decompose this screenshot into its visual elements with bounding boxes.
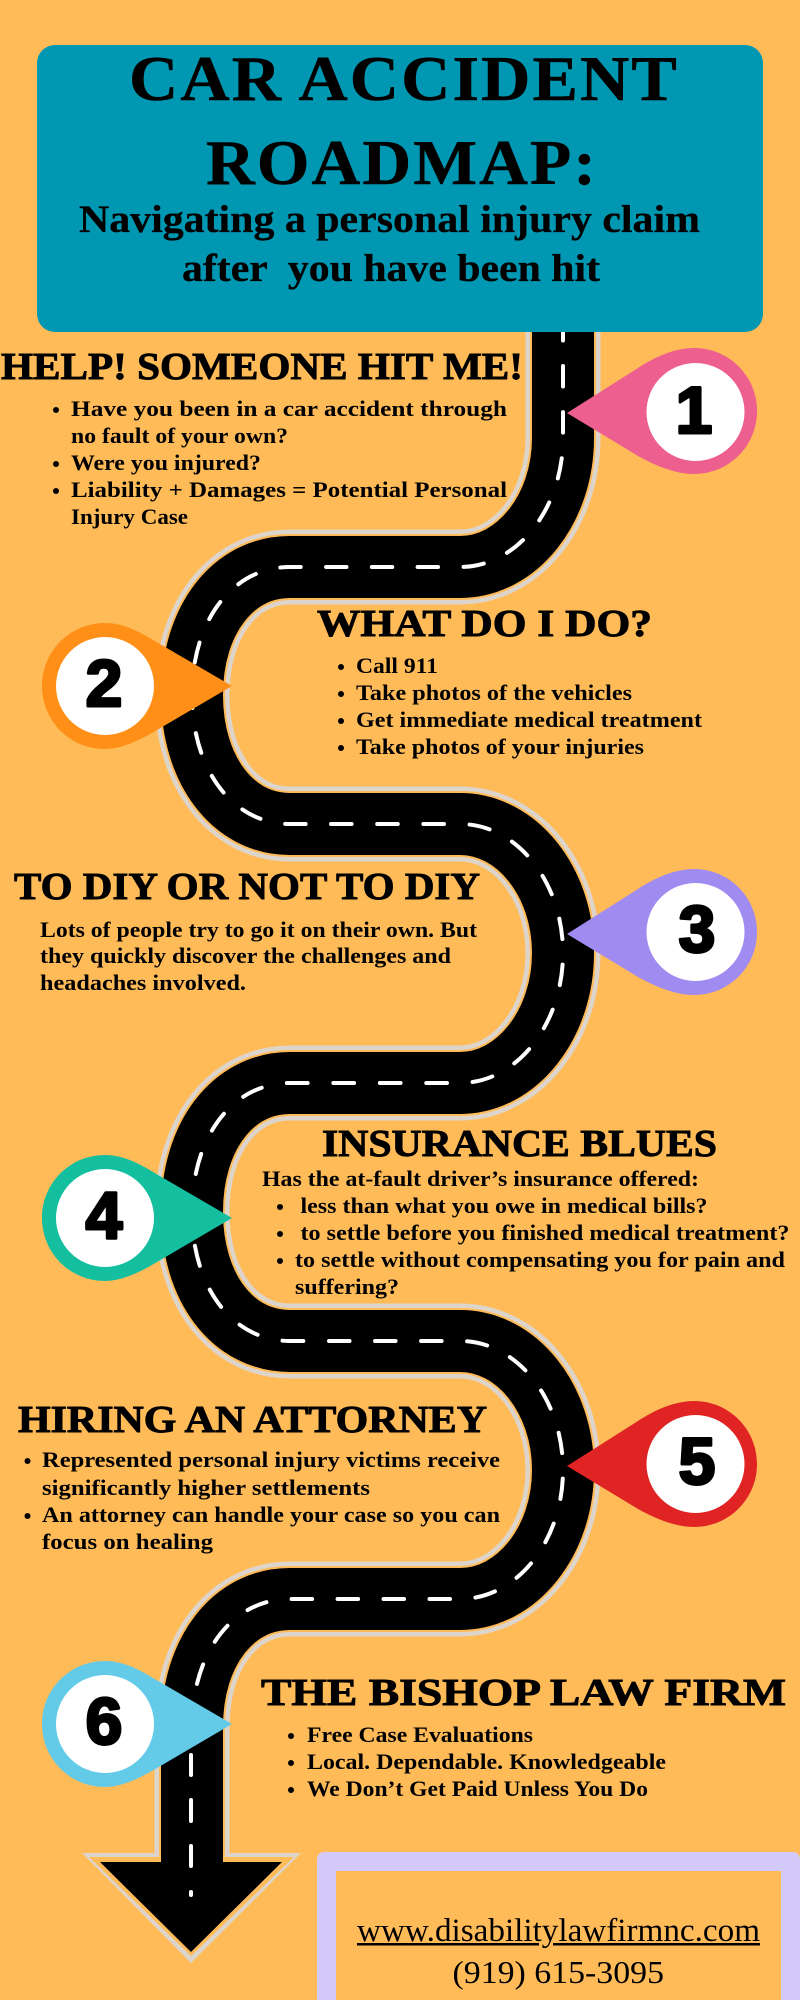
icon: pin 5 — [567, 1401, 757, 1527]
list: step 2 bullets: Call 911 — [356, 653, 438, 678]
phone number: (919) 615-3095 — [452, 1954, 664, 1990]
text block: DIY: they quickly discover the challenges and — [40, 943, 451, 968]
heading: what do I do: WHAT DO I DO? — [317, 603, 652, 645]
list: step 1 bullets: Injury Case — [71, 504, 188, 529]
list: step 1 bullets: Have you been in a car accident through — [71, 396, 507, 421]
list: step 5 bullets: focus on healing — [42, 1529, 213, 1554]
icon: pin 6: 6 — [86, 1684, 122, 1758]
list: step 6 bullets: We Don’t Get Paid Unless You Do — [307, 1776, 648, 1801]
title — [129, 43, 679, 198]
list: step 2 bullets: Take photos of the vehicles — [356, 680, 632, 705]
list: step 1 bullets: Liability + Damages = Potential Personal — [71, 477, 507, 502]
list: step 1 bullets: no fault of your own? — [71, 423, 288, 448]
title banner — [37, 43, 763, 332]
heading: hiring an attorney: HIRING AN ATTORNEY — [18, 1399, 487, 1441]
panel: step 6 law firm — [261, 1672, 786, 1801]
icon: pin 2: 2 — [86, 646, 122, 720]
list: step 5 bullets: Represented personal injury victims receive — [42, 1447, 500, 1472]
icon: pin 3: 3 — [679, 892, 715, 966]
heading: the bishop law firm: THE BISHOP LAW FIRM — [261, 1672, 786, 1714]
icon: pin 2 — [42, 623, 232, 749]
heading: insurance blues: INSURANCE BLUES — [322, 1123, 717, 1165]
icon: pin 4: 4 — [86, 1178, 123, 1252]
icon: pin 4 — [42, 1155, 232, 1281]
text block: DIY: Lots of people try to go it on their own. But — [40, 917, 478, 942]
heading: DIY: TO DIY OR NOT TO DIY — [14, 866, 480, 908]
list: step 5 bullets: significantly higher settlements — [42, 1475, 370, 1500]
title: CAR ACCIDENT — [129, 43, 679, 114]
text block: insurance: less than what you owe in medical bills? — [300, 1193, 708, 1218]
website link: www.disabilitylawfirmnc.com — [357, 1913, 760, 1949]
panel: step 3 DIY — [14, 866, 480, 995]
list: step 1 bullets — [53, 396, 507, 529]
subtitle — [79, 198, 700, 290]
panel: step 5 attorney — [18, 1399, 500, 1554]
text block: insurance: Has the at-fault driver’s insurance offered: — [262, 1166, 699, 1191]
list: step 5 bullets: An attorney can handle your case so you can — [42, 1502, 500, 1527]
panel: step 1 help — [1, 346, 523, 529]
panel: step 2 what do I do — [317, 603, 703, 759]
icon: pin 5: 5 — [679, 1424, 715, 1498]
list: step 5 bullets — [24, 1447, 500, 1554]
subtitle: Navigating a personal injury claim — [79, 198, 700, 241]
list: step 6 bullets: Local. Dependable. Knowledgeable — [307, 1749, 666, 1774]
icon: pin 3 — [567, 869, 757, 995]
icon: pin 1: 1 — [676, 373, 712, 447]
list: step 2 bullets: Take photos of your injuries — [356, 734, 644, 759]
contact box — [317, 1852, 800, 2000]
text block: insurance: to settle before you finished medical treatment? — [300, 1220, 790, 1245]
winding road with arrow — [82, 318, 563, 1963]
text block: DIY: headaches involved. — [40, 970, 246, 995]
title: ROADMAP: — [206, 127, 598, 198]
icon: pin 1 — [567, 348, 757, 474]
icon: pin 6 — [42, 1661, 232, 1787]
text block: DIY — [40, 917, 478, 995]
text block: insurance: suffering? — [295, 1274, 399, 1299]
list: step 2 bullets — [338, 653, 703, 759]
list: step 1 bullets: Were you injured? — [71, 450, 261, 475]
list: step 6 bullets: Free Case Evaluations — [307, 1722, 533, 1747]
list: step 6 bullets — [288, 1722, 666, 1801]
panel: step 4 insurance — [262, 1123, 790, 1299]
subtitle: after you have been hit — [182, 247, 600, 290]
text block: insurance: to settle without compensating you for pain and — [295, 1247, 785, 1272]
text block: insurance — [262, 1166, 790, 1299]
list: step 2 bullets: Get immediate medical treatment — [356, 707, 703, 732]
heading: help: HELP! SOMEONE HIT ME! — [1, 346, 523, 388]
